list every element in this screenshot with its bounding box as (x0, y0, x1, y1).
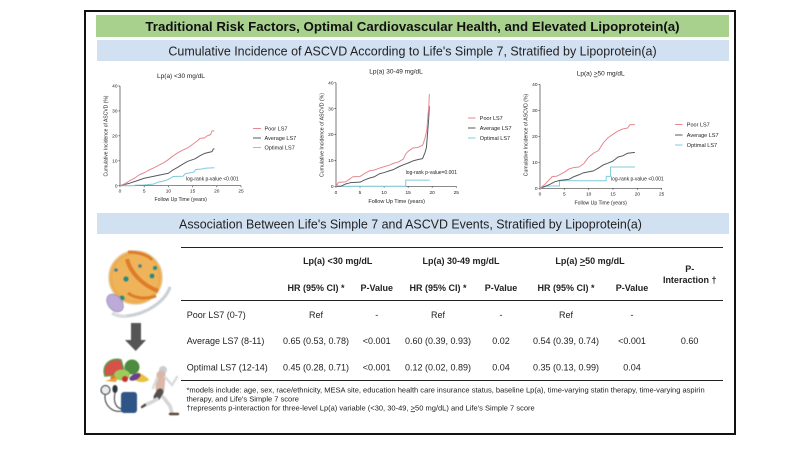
legend: Poor LS7 (480, 116, 503, 122)
axes (118, 86, 241, 187)
y axis label: Cumulative Incidence of ASCVD (%) (104, 95, 110, 176)
row: optimal: 0.35 (0.13, 0.99) (533, 363, 599, 373)
tick labels: 0 (535, 186, 538, 192)
legend: Average LS7 (264, 136, 296, 142)
axes (538, 84, 662, 190)
chart title: Lp(a) 30-49 mg/dL (369, 68, 423, 76)
column headers: HR (95% CI) * (409, 283, 467, 293)
row: average: 0.60 (681, 336, 698, 346)
row: optimal: 0.45 (0.28, 0.71) (283, 363, 349, 373)
legend: Optimal LS7 (480, 136, 510, 142)
curves (336, 94, 430, 186)
tick labels: 30 (328, 106, 334, 112)
row: average: 0.60 (0.39, 0.93) (405, 336, 471, 346)
legend: Optimal LS7 (687, 143, 717, 149)
row: poor: - (630, 310, 634, 320)
row: poor: Ref (559, 310, 573, 320)
section heading: cumulative incidence (97, 40, 729, 61)
column headers: P- (685, 264, 694, 274)
row: average: <0.001 (618, 336, 646, 346)
tick labels: 40 (112, 84, 118, 90)
chart: Lp(a) under 30 (104, 73, 296, 203)
x axis label: Follow Up Time (years) (155, 197, 207, 203)
tick labels: 25 (659, 192, 665, 198)
legend: Average LS7 (480, 126, 512, 132)
tick labels: 30 (112, 109, 118, 115)
tick labels: 0 (119, 188, 122, 194)
chart title: Lp(a) >50 mg/dL (577, 70, 625, 78)
row: optimal: 0.04 (623, 363, 641, 373)
group headers: Lp(a) >50 mg/dL (555, 256, 625, 266)
row: optimal: <0.001 (363, 363, 391, 373)
legend (468, 116, 512, 142)
legend: Average LS7 (687, 133, 719, 139)
row: average: Average LS7 (8-11) (187, 336, 264, 346)
tick labels: 25 (238, 188, 244, 194)
footnotes (186, 386, 705, 412)
tick labels: 10 (586, 192, 592, 198)
tick labels: 20 (430, 190, 435, 196)
row: poor: - (500, 310, 502, 320)
row: poor: Poor LS7 (0-7) (187, 310, 246, 320)
tick labels: 20 (112, 134, 118, 140)
legend: Poor LS7 (687, 122, 710, 128)
row: poor: Ref (431, 310, 445, 320)
tick labels: 25 (454, 190, 459, 196)
icon: lipoprotein particle (103, 250, 170, 316)
column headers: P-Value (485, 283, 517, 293)
group headers (303, 256, 625, 266)
tick labels: 10 (532, 160, 538, 166)
y axis label: Cumulative Incidence of ASCVD (%) (524, 94, 530, 176)
arrow: down (125, 323, 146, 351)
footnotes: therapy, and Life's Simple 7 score (186, 394, 299, 404)
tick labels: 20 (328, 132, 334, 138)
column headers (287, 264, 716, 293)
icon: runner (142, 366, 178, 414)
row: average: 0.54 (0.39, 0.74) (533, 336, 599, 346)
log-rank note: log-rank p-value <0.001 (186, 176, 239, 182)
column headers: P-Value (360, 283, 393, 293)
group headers: Lp(a) 30-49 mg/dL (422, 256, 500, 266)
tick labels: 30 (532, 108, 538, 114)
legend (675, 122, 719, 149)
chart: Lp(a) 30-49 (320, 68, 512, 205)
chart: Lp(a) 50 or above (524, 70, 719, 206)
table rules (181, 248, 723, 380)
tick labels: 5 (359, 190, 362, 196)
table (181, 248, 723, 380)
tick labels: 5 (143, 188, 146, 194)
tick labels: 20 (532, 134, 538, 140)
tick labels: 15 (406, 190, 411, 196)
section heading: association: Association Between Life's Simple 7 and ASCVD Events, Stratified by Lipoprotein(a) (179, 218, 642, 232)
row: average: <0.001 (363, 336, 391, 346)
tick labels: 0 (335, 190, 338, 196)
title banner: Traditional Risk Factors, Optimal Cardiovascular Health, and Elevated Lipoprotein(a) (145, 19, 680, 34)
group headers: Lp(a) <30 mg/dL (303, 256, 373, 266)
row: poor (187, 310, 633, 320)
x axis label: Follow Up Time (years) (368, 199, 425, 205)
legend: Poor LS7 (264, 126, 287, 132)
tick labels: 0 (539, 192, 542, 198)
curves (540, 125, 635, 188)
tick labels: 5 (563, 192, 566, 198)
row: optimal: 0.12 (0.02, 0.89) (405, 363, 471, 373)
tick labels: 10 (166, 188, 171, 194)
tick labels (328, 80, 459, 196)
icon: fruits and vegetables (104, 359, 149, 382)
tick labels: 40 (328, 80, 334, 86)
curves (120, 131, 214, 186)
column headers: Interaction † (663, 275, 716, 285)
tick labels: 20 (635, 192, 640, 198)
tick labels (532, 82, 665, 198)
row: optimal (187, 363, 641, 373)
tick labels: 40 (532, 82, 538, 88)
section heading: cumulative incidence: Cumulative Incidence of ASCVD According to Life's Simple 7, Stratified by Lipoprotein(a) (168, 44, 657, 58)
log-rank note: log-rank p-value=0.001 (406, 170, 457, 176)
footnotes: †represents p-interaction for three-level Lp(a) variable (<30, 30-49, >50 mg/dL) and Life's Simple 7 score (186, 403, 535, 412)
tick labels: 15 (610, 192, 616, 198)
tick labels: 0 (115, 183, 118, 189)
row: average: 0.02 (492, 336, 510, 346)
row: poor: Ref (309, 310, 323, 320)
legend (253, 126, 296, 152)
section heading: association (97, 213, 729, 234)
icon: blood pressure monitor (101, 385, 137, 413)
outer frame (85, 11, 735, 434)
row: average: 0.65 (0.53, 0.78) (283, 336, 349, 346)
tick labels (112, 84, 244, 194)
x axis label: Follow Up Time (years) (575, 200, 627, 206)
tick labels: 10 (381, 190, 387, 196)
legend: Optimal LS7 (264, 146, 295, 152)
row: optimal: 0.04 (492, 363, 510, 373)
row: average (187, 336, 698, 346)
log-rank note: log-rank p-value <0.001 (611, 177, 664, 183)
footnotes: *models include: age, sex, race/ethnicity, MESA site, education health care insurance status, baseline Lp(a), time-varying statin therapy, time-varying aspirin (186, 386, 705, 394)
chart title: Lp(a) <30 mg/dL (157, 73, 205, 80)
y axis label: Cumulative Incidence of ASCVD (%) (320, 93, 326, 177)
tick labels: 20 (214, 188, 220, 194)
row: poor: - (375, 310, 378, 320)
tick labels: 0 (331, 184, 334, 190)
tick labels: 10 (112, 158, 118, 164)
row: optimal: Optimal LS7 (12-14) (187, 363, 268, 373)
title banner (96, 15, 729, 37)
tick labels: 10 (328, 158, 334, 164)
axes (334, 83, 456, 188)
column headers: HR (95% CI) * (537, 283, 595, 293)
tick labels: 15 (190, 188, 196, 194)
column headers: HR (95% CI) * (287, 283, 345, 293)
column headers: P-Value (616, 283, 648, 293)
